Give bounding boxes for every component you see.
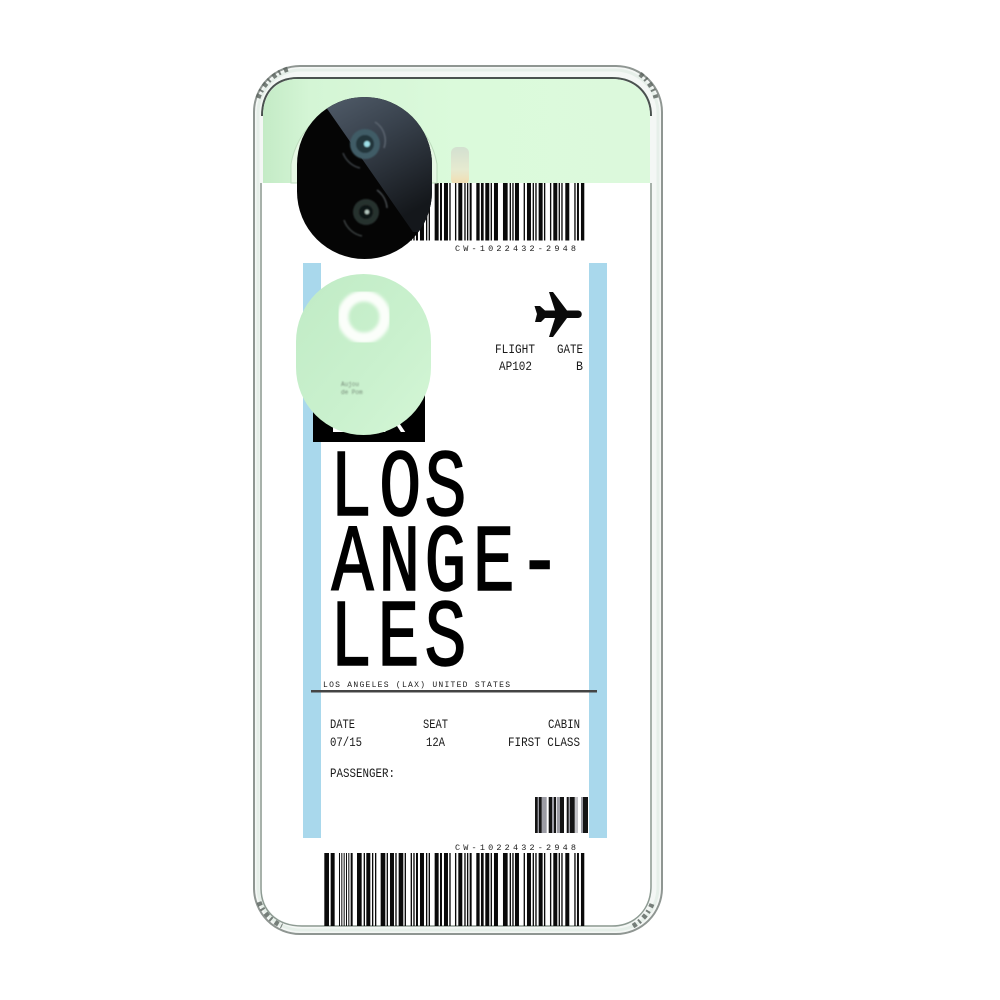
left blue stripe	[303, 263, 321, 838]
module text	[341, 381, 363, 396]
ticket details: DATE	[330, 718, 355, 732]
flash ring	[343, 296, 385, 338]
upper lens	[343, 122, 385, 168]
module text: Aujou	[341, 381, 359, 388]
flight details: B	[576, 360, 583, 374]
mint pill module	[296, 274, 431, 435]
city name: LES	[330, 586, 466, 695]
ticket details: 12A	[426, 736, 445, 750]
bottom barcode number: CW-1022432-2948	[455, 843, 576, 853]
flight details: FLIGHT	[495, 343, 535, 357]
airport code box	[313, 390, 425, 446]
plane icon	[534, 292, 582, 337]
phone back: mint top	[263, 79, 650, 183]
flight details	[495, 343, 583, 374]
ticket details	[330, 718, 580, 781]
right blue stripe	[589, 263, 607, 838]
bottom barcode	[324, 853, 584, 926]
glass reflection	[326, 97, 432, 232]
ticket details: PASSENGER:	[330, 767, 395, 781]
divider	[311, 690, 597, 692]
small barcode	[535, 797, 588, 833]
phone case	[254, 66, 662, 934]
camera shadow ring	[291, 102, 437, 183]
city name	[330, 436, 561, 695]
flight details: AP102	[499, 360, 532, 374]
airport line text: LOS ANGELES (LAX) UNITED STATES	[323, 681, 510, 690]
city name: LOS	[330, 436, 466, 545]
ticket details: SEAT	[423, 718, 448, 732]
airport code box: LAX	[328, 396, 406, 446]
top barcode	[324, 183, 584, 240]
boarding pass white area	[262, 183, 650, 925]
flash module	[451, 147, 469, 185]
flight details: GATE	[557, 343, 583, 357]
ticket details: FIRST CLASS	[508, 736, 580, 750]
city name: ANGE-	[332, 511, 561, 620]
lower lens	[344, 190, 387, 236]
module text: de Pom	[341, 389, 363, 396]
ticket details: CABIN	[548, 718, 580, 732]
camera island	[297, 90, 440, 259]
top barcode number: CW-1022432-2948	[455, 244, 576, 254]
ticket details: 07/15	[330, 736, 362, 750]
